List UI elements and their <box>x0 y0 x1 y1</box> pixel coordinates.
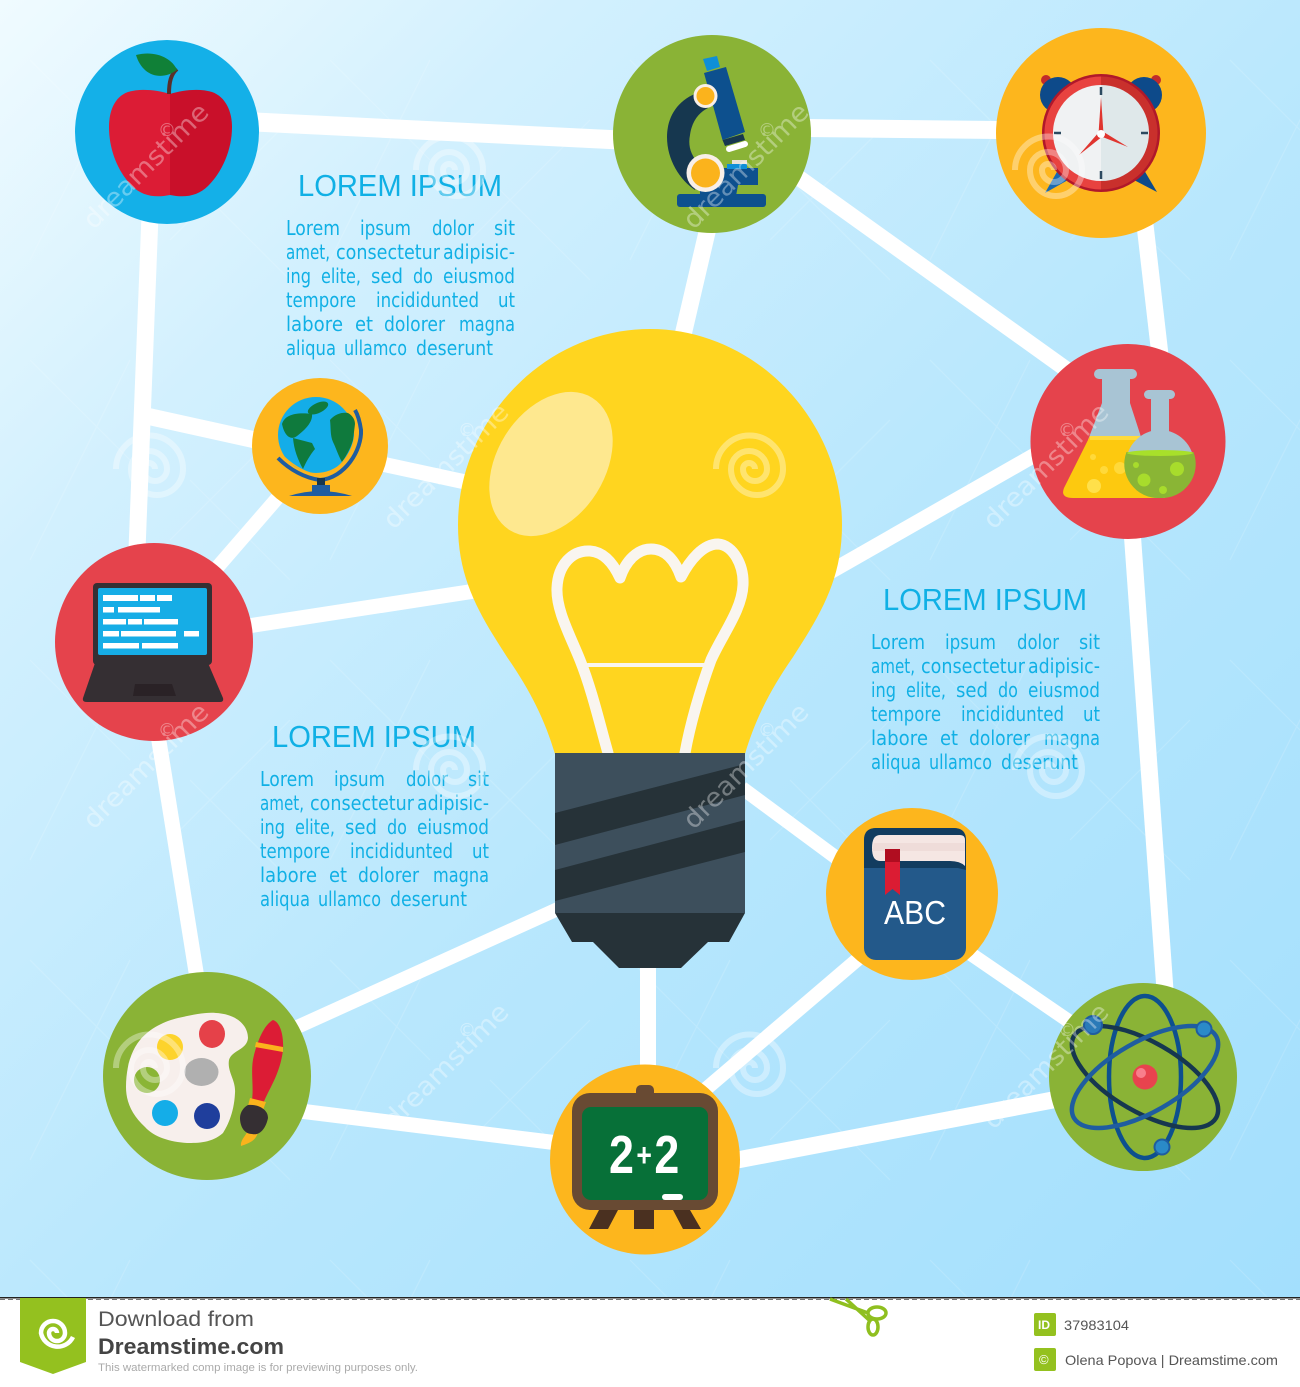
network connector lines <box>137 122 1165 1161</box>
footer badge: ribbon <box>20 1298 86 1374</box>
footer author: Olena Popova | Dreamstime.com <box>1065 1352 1278 1368</box>
paragraph: magna <box>433 863 489 887</box>
paragraph: et <box>940 726 958 750</box>
paragraph <box>871 630 1100 774</box>
icon: apple <box>75 40 259 224</box>
paragraph: et <box>355 312 373 336</box>
paragraph: aliqua <box>286 336 336 360</box>
paragraph: ing <box>871 678 896 702</box>
watermark overlay: © <box>1058 420 1076 441</box>
paragraph: consectetur <box>310 791 414 815</box>
watermark overlay: dreamstime <box>377 397 515 535</box>
paragraph: sed <box>345 815 377 839</box>
paragraph: labore <box>260 863 317 887</box>
paragraph: labore <box>871 726 928 750</box>
watermark overlay: © <box>1058 1020 1076 1041</box>
paragraph: consectetur <box>336 240 440 264</box>
icon: flasks <box>1030 344 1226 539</box>
paragraph <box>286 216 515 360</box>
icon: alarm clock <box>996 28 1206 238</box>
footer copyright badge: © <box>1039 1352 1049 1367</box>
paragraph: dolorer <box>384 312 445 336</box>
paragraph: tempore <box>871 702 941 726</box>
footer strip <box>0 1297 1300 1387</box>
paragraph: ullamco <box>344 336 407 360</box>
paragraph: ullamco <box>318 887 381 911</box>
paragraph: sit <box>494 216 515 240</box>
watermark overlay: © <box>758 720 776 741</box>
paragraph: do <box>998 678 1018 702</box>
paragraph: ipsum <box>945 630 996 654</box>
watermark overlay <box>77 97 1115 1135</box>
bulb glass <box>458 329 842 754</box>
icon: scissors <box>830 1299 886 1335</box>
paragraph: incididunted <box>376 288 479 312</box>
icon: globe <box>252 378 388 514</box>
paragraph: elite, <box>906 678 946 702</box>
watermark overlay: dreamstime <box>77 97 215 235</box>
paragraph: eiusmod <box>417 815 489 839</box>
paragraph: aliqua <box>260 887 310 911</box>
icon: palette and brush <box>103 972 311 1180</box>
icon: atom <box>1049 983 1237 1171</box>
paragraph: consectetur <box>921 654 1025 678</box>
paragraph: incididunted <box>961 702 1064 726</box>
chalk sum: 2 <box>654 1124 679 1185</box>
footer text: download: Download from <box>98 1308 254 1331</box>
paragraph: deserunt <box>1001 750 1078 774</box>
watermark overlay: dreamstime <box>677 97 815 235</box>
icon: laptop <box>55 543 253 741</box>
filament <box>557 544 743 753</box>
footer id number: 37983104 <box>1064 1317 1129 1333</box>
paragraph: adipisic- <box>1028 654 1100 678</box>
icon: chalkboard <box>550 1064 740 1254</box>
paragraph: aliqua <box>871 750 921 774</box>
footer id badge <box>1034 1313 1056 1336</box>
paragraph: et <box>329 863 347 887</box>
watermark overlay: dreamstime <box>77 697 215 835</box>
paragraph: amet, <box>871 654 915 678</box>
paragraph: ut <box>472 839 489 863</box>
watermark overlay: © <box>458 1020 476 1041</box>
paragraph: tempore <box>260 839 330 863</box>
paragraph: ut <box>498 288 515 312</box>
paragraph: ipsum <box>334 767 385 791</box>
watermark overlay: © <box>158 720 176 741</box>
heading: LOREM IPSUM <box>883 582 1087 617</box>
footer id badge: ID <box>1038 1318 1050 1332</box>
paragraph: Lorem <box>260 767 314 791</box>
screw base <box>555 753 745 968</box>
paragraph: ut <box>1083 702 1100 726</box>
paragraph: do <box>413 264 433 288</box>
paragraph: eiusmod <box>443 264 515 288</box>
paragraph: adipisic- <box>417 791 489 815</box>
watermark overlay: dreamstime <box>977 397 1115 535</box>
watermark overlay: dreamstime <box>377 997 515 1135</box>
watermark overlay: © <box>758 120 776 141</box>
paragraph: deserunt <box>416 336 493 360</box>
paragraph: dolorer <box>358 863 419 887</box>
paragraph: dolorer <box>969 726 1030 750</box>
paragraph: tempore <box>286 288 356 312</box>
icon: microscope <box>613 35 811 233</box>
text block: lower left <box>260 719 489 911</box>
paragraph: Lorem <box>286 216 340 240</box>
paragraph: elite, <box>295 815 335 839</box>
paragraph: deserunt <box>390 887 467 911</box>
chalk sum: + <box>636 1138 652 1174</box>
watermark overlay: © <box>158 120 176 141</box>
paragraph: dolor <box>432 216 474 240</box>
icon: book <box>826 808 998 980</box>
heading: LOREM IPSUM <box>298 168 502 203</box>
paragraph: sed <box>956 678 988 702</box>
paragraph: magna <box>459 312 515 336</box>
paragraph: sit <box>468 767 489 791</box>
paragraph <box>260 767 489 911</box>
paragraph: do <box>387 815 407 839</box>
bulb highlight <box>464 369 638 559</box>
text block: right <box>871 582 1100 774</box>
paragraph: ipsum <box>360 216 411 240</box>
paragraph: ullamco <box>929 750 992 774</box>
footer text: brand: Dreamstime.com <box>98 1334 284 1359</box>
paragraph: eiusmod <box>1028 678 1100 702</box>
heading: LOREM IPSUM <box>272 719 476 754</box>
chalk sum: 2 <box>609 1124 634 1185</box>
footer text: notice: This watermarked comp image is for previewing purposes only. <box>98 1362 418 1374</box>
paragraph: incididunted <box>350 839 453 863</box>
paragraph: ing <box>286 264 311 288</box>
watermark overlay: dreamstime <box>677 697 815 835</box>
footer copyright badge <box>1034 1348 1056 1371</box>
text block: top left <box>286 168 515 360</box>
paragraph: sit <box>1079 630 1100 654</box>
paragraph: ing <box>260 815 285 839</box>
watermark overlay: © <box>458 420 476 441</box>
light bulb <box>458 329 842 968</box>
paragraph: amet, <box>286 240 330 264</box>
paragraph: dolor <box>406 767 448 791</box>
paragraph: dolor <box>1017 630 1059 654</box>
paragraph: elite, <box>321 264 361 288</box>
paragraph: sed <box>371 264 403 288</box>
paragraph: adipisic- <box>443 240 515 264</box>
paragraph: Lorem <box>871 630 925 654</box>
paragraph: amet, <box>260 791 304 815</box>
paragraph: labore <box>286 312 343 336</box>
watermark overlay: dreamstime <box>977 997 1115 1135</box>
paragraph: magna <box>1044 726 1100 750</box>
book label: ABC <box>884 894 946 931</box>
